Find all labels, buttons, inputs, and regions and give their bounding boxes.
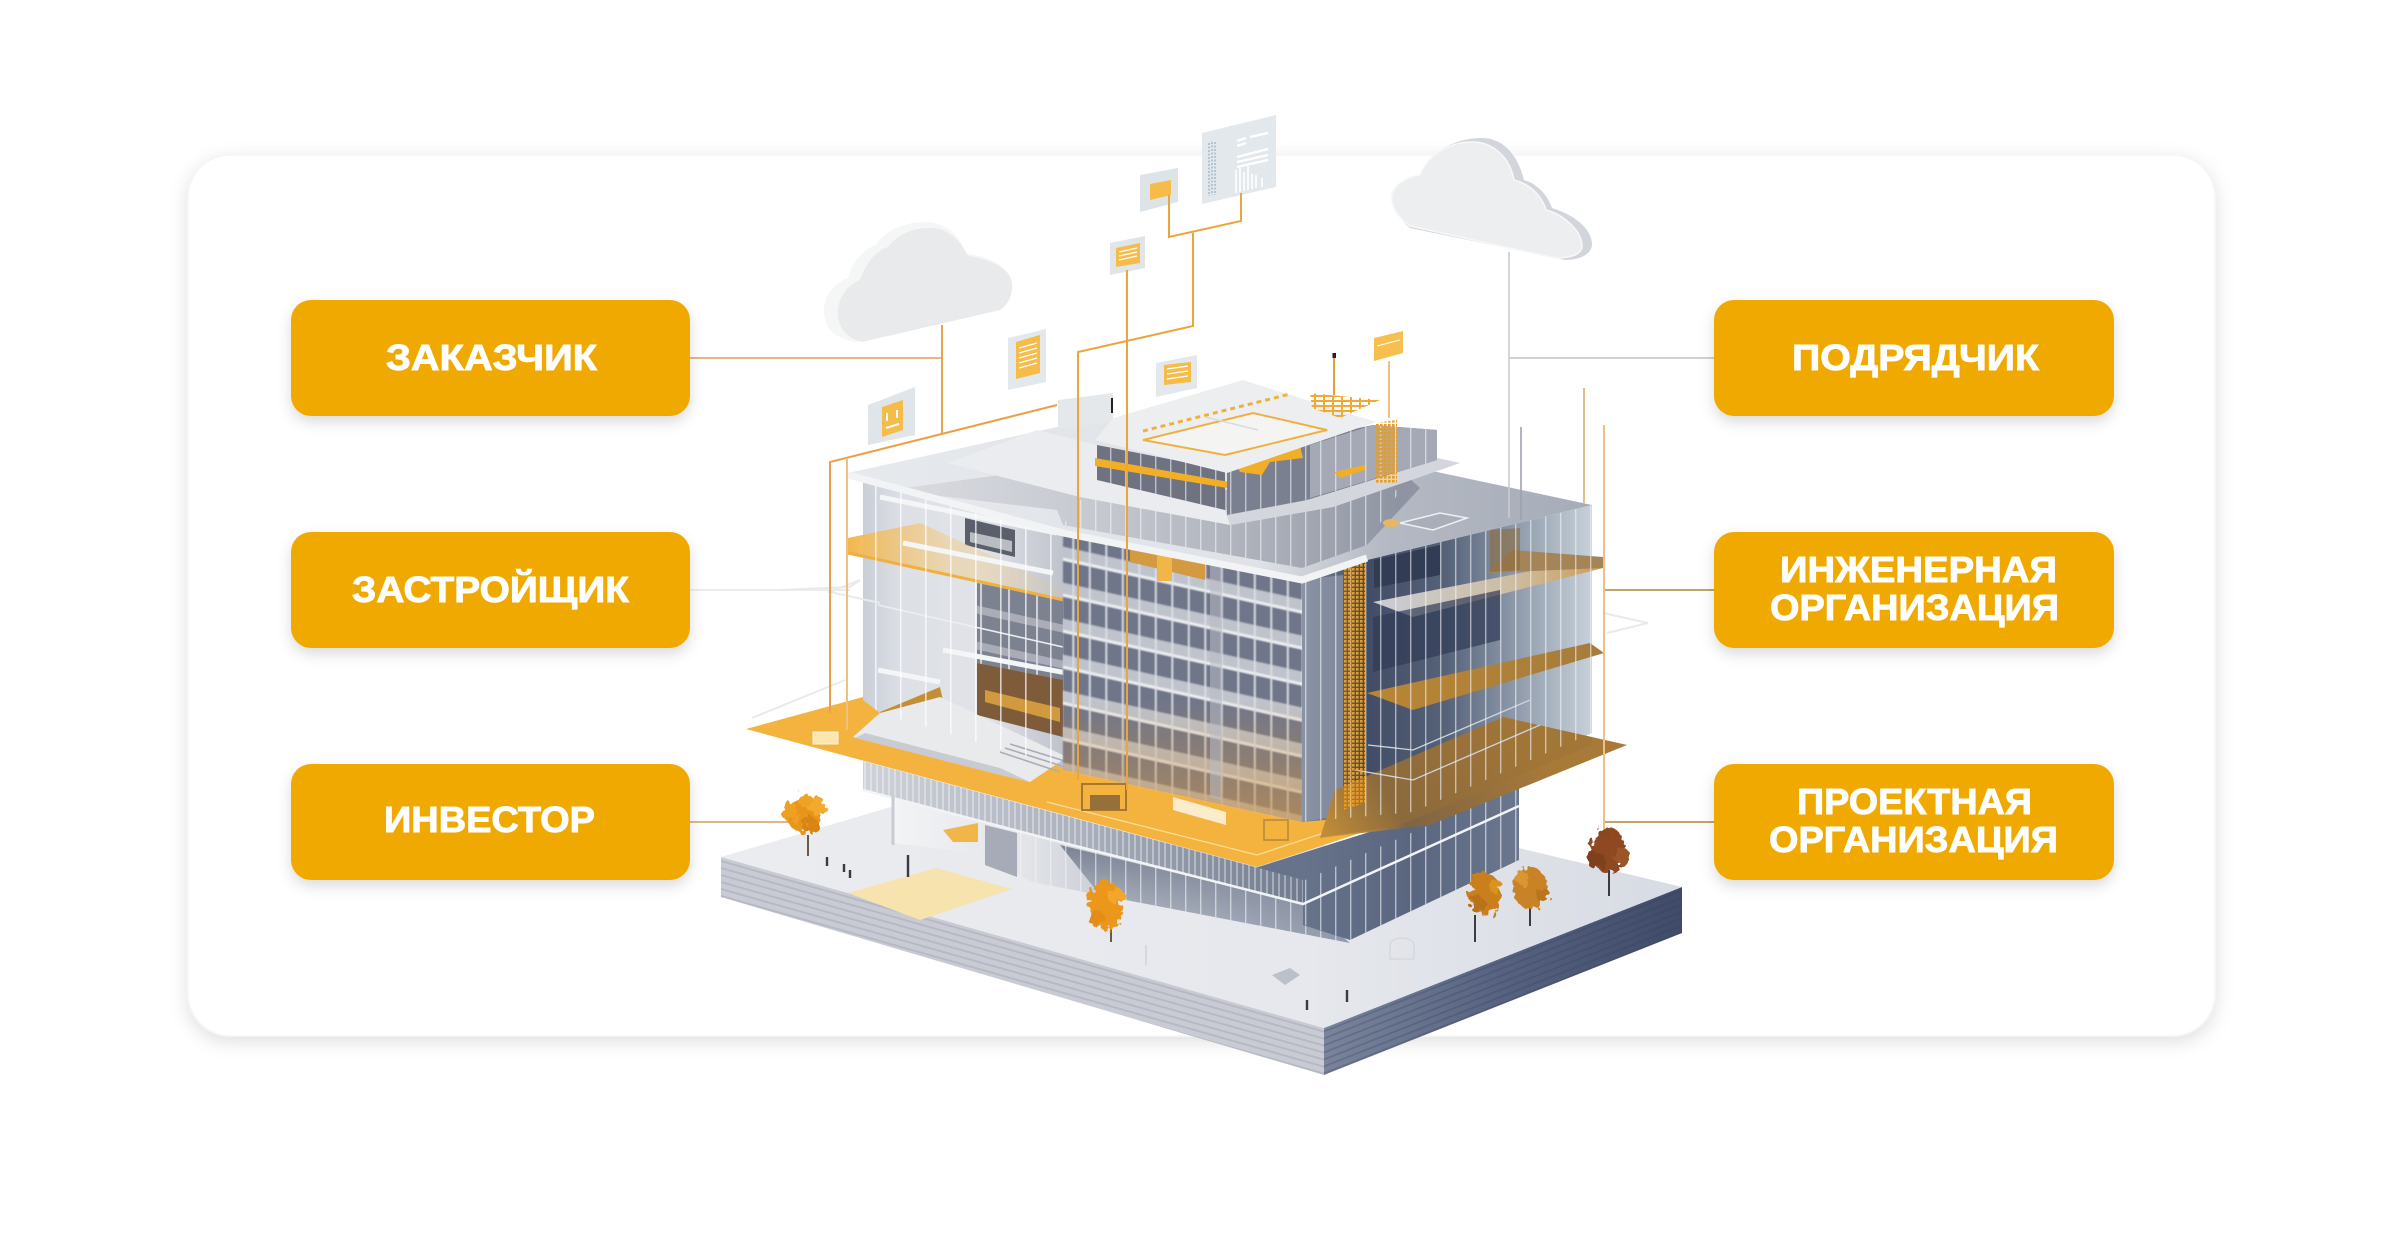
wood interior [977, 663, 1063, 737]
entrance panel [943, 823, 978, 842]
label: ЗАКАЗЧИК: ЗАКАЗЧИК [386, 337, 598, 378]
interior floor orange [880, 687, 945, 730]
document: tall page [1008, 329, 1046, 390]
document: poster [868, 387, 915, 445]
platform left side [721, 857, 1324, 1075]
tower: left wing [848, 478, 1087, 782]
orange interior [1130, 548, 1205, 580]
connector lines to labels [690, 358, 1714, 822]
lower facade: left [893, 795, 1350, 943]
slab with orange edge: lower [1367, 643, 1604, 710]
label: ЗАСТРОЙЩИК: ЗАСТРОЙЩИК [352, 568, 630, 610]
label: ПРОЕКТНАЯ ОРГАНИЗАЦИЯ [1714, 764, 2114, 880]
lower floors [863, 761, 1519, 943]
slab fascia [848, 475, 1367, 580]
label: ИНЖЕНЕРНАЯ ОРГАНИЗАЦИЯ: ОРГАНИЗАЦИЯ [1770, 587, 2059, 628]
steps [1000, 744, 1068, 772]
document: sheet [1156, 355, 1197, 397]
top floor glass: left [1097, 445, 1225, 510]
label: ПРОЕКТНАЯ ОРГАНИЗАЦИЯ: ОРГАНИЗАЦИЯ [1769, 819, 2058, 860]
background panel [188, 155, 2215, 1036]
dark interior [1374, 545, 1440, 588]
floor furniture [813, 732, 1288, 840]
tree: right 1 [1469, 873, 1502, 942]
ghost floor plan outlines [752, 580, 1648, 718]
label: ИНЖЕНЕРНАЯ ОРГАНИЗАЦИЯ [1714, 532, 2114, 648]
orange band upper [848, 523, 1073, 602]
people and street furniture [827, 855, 1414, 1010]
tower: right wing [1302, 505, 1627, 838]
antenna [1333, 353, 1335, 395]
document: small chart [1140, 168, 1178, 212]
floor surface [853, 697, 1067, 782]
document: report [1202, 115, 1276, 204]
setback glazing [890, 470, 1420, 568]
penthouse box [1058, 393, 1113, 428]
document: orange tag [1374, 331, 1403, 361]
tree: left [781, 793, 825, 856]
label: ИНЖЕНЕРНАЯ ОРГАНИЗАЦИЯ: ИНЖЕНЕРНАЯ [1780, 549, 2057, 590]
main slab [848, 420, 1592, 580]
label: ПРОЕКТНАЯ ОРГАНИЗАЦИЯ: ПРОЕКТНАЯ [1797, 781, 2032, 822]
label: ИНВЕСТОР: ИНВЕСТОР [384, 799, 595, 840]
lines in floor [1368, 700, 1530, 750]
slab with orange edge: upper [1373, 528, 1603, 617]
cloud: left [824, 222, 1012, 342]
second slab [947, 430, 1460, 525]
document: text [1110, 236, 1145, 275]
tree: right 2 [1513, 867, 1550, 926]
label: ПОДРЯДЧИК [1714, 300, 2114, 416]
side column [1302, 575, 1343, 822]
label: ИНВЕСТОР [291, 764, 690, 880]
dark glazing [977, 583, 1063, 680]
cloud: right [1392, 138, 1592, 260]
roof scaffold [1310, 393, 1380, 418]
entrance mat [848, 868, 1012, 920]
roof levels [848, 353, 1592, 580]
label: ЗАКАЗЧИК [291, 300, 690, 416]
network lines [830, 193, 1604, 830]
scaffold [1343, 560, 1365, 810]
machine room [965, 518, 1015, 557]
lower facade: right [1255, 785, 1519, 940]
label: ЗАСТРОЙЩИК [291, 532, 690, 648]
tree: far right [1587, 827, 1630, 896]
roof surface [1095, 380, 1376, 473]
plan outline on slab [1400, 513, 1467, 530]
base platform [721, 807, 1682, 1075]
document icons [868, 115, 1403, 445]
tower: center facade [1063, 533, 1302, 822]
white slabs [878, 497, 1067, 682]
center column [1210, 560, 1222, 800]
platform right side [1324, 887, 1682, 1075]
platform top surface [721, 807, 1682, 1028]
orange floor plate [746, 697, 1627, 867]
top floor glass: right [1227, 425, 1437, 515]
entrance columns [985, 825, 1017, 877]
floor seen through glass [1320, 717, 1627, 838]
mezzanine band [863, 761, 1303, 904]
tree: center [1088, 881, 1124, 942]
label: ПОДРЯДЧИК: ПОДРЯДЧИК [1792, 337, 2040, 378]
